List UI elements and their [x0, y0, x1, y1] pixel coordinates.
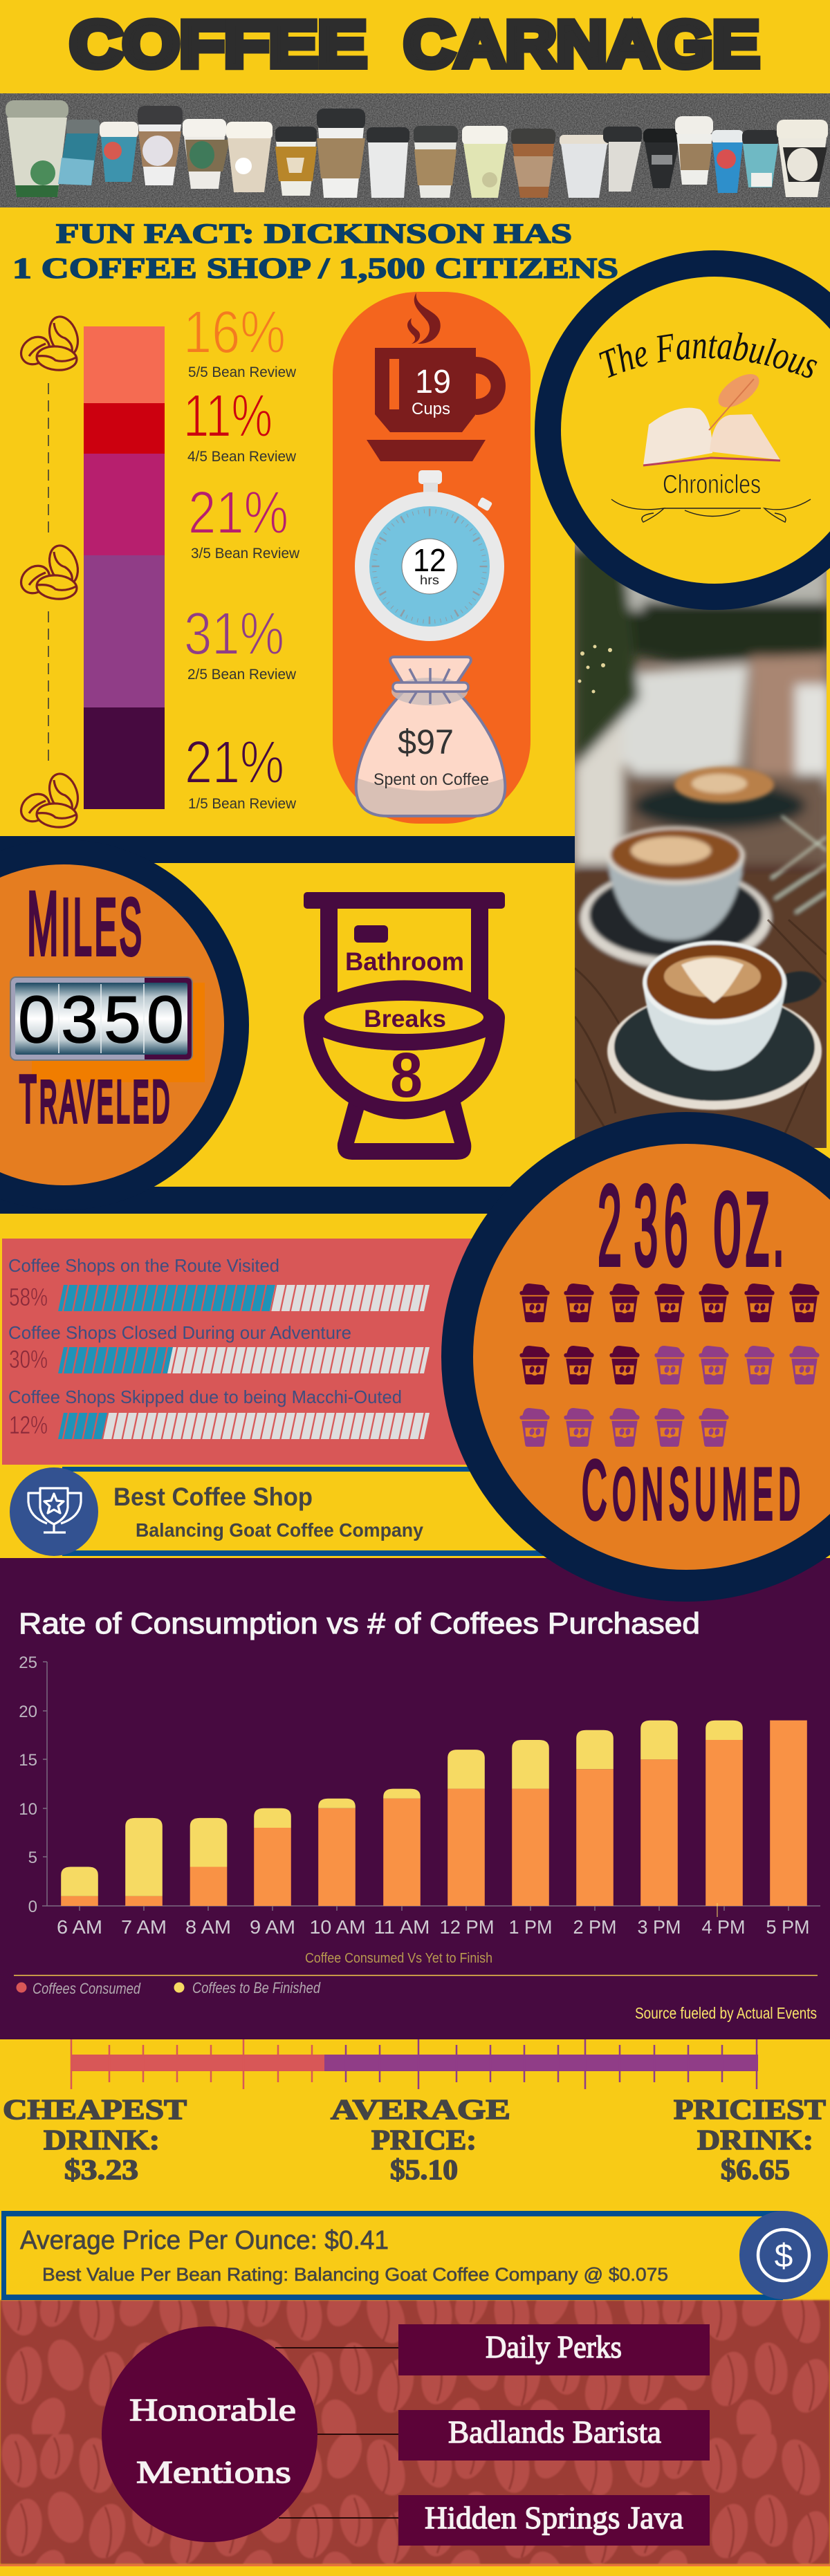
bar: closed	[8, 1322, 430, 1373]
icon: open book with feather	[643, 368, 780, 465]
breaks label: Breaks	[364, 1006, 446, 1032]
bar: skipped	[8, 1387, 430, 1439]
cup 14	[603, 127, 642, 192]
bar: visited: Coffee Shops on the Route Visited	[8, 1255, 279, 1276]
1/5 stat: 1/5 Bean Review	[188, 796, 297, 812]
priciest drink	[674, 2093, 826, 2185]
bar: skipped: Coffee Shops Skipped due to being Macchi-Outed	[8, 1387, 402, 1407]
panel: average price per ounce	[1, 2211, 828, 2300]
x axis labels: 3 PM	[638, 1916, 681, 1938]
odometer: 0	[147, 983, 184, 1057]
y axis labels: 10	[19, 1800, 37, 1819]
axis subtitle: Coffee Consumed Vs Yet to Finish	[305, 1951, 492, 1966]
dashed connector	[48, 383, 49, 762]
legend: Coffees Consumed	[33, 1980, 141, 1997]
priciest drink: PRICIEST	[674, 2093, 826, 2125]
y axis labels: 15	[19, 1751, 37, 1770]
banner: row of coffee cups	[0, 93, 830, 207]
y axis labels: 20	[19, 1703, 37, 1721]
honorable mentions circle: Honorable	[129, 2392, 296, 2427]
x axis labels: 2 PM	[573, 1916, 617, 1938]
logo: The Fantabulous Chronicles	[535, 250, 830, 610]
amount: 236	[598, 1162, 688, 1290]
cup 9	[367, 127, 409, 198]
mention: hidden springs java	[398, 2495, 710, 2546]
icon: dollar coin	[739, 2211, 828, 2299]
divider	[14, 1975, 818, 1976]
foliage speckles	[578, 645, 612, 693]
average price	[331, 2093, 510, 2185]
cheapest drink	[3, 2093, 187, 2185]
3/5 stat: 21%	[188, 479, 288, 546]
honorable mentions circle: Mentions	[136, 2454, 291, 2490]
icon: coffee cup with 19 cups: Cups	[412, 400, 450, 418]
mention: daily perks: Daily Perks	[486, 2329, 622, 2364]
3/5 stat: 3/5 Bean Review	[191, 546, 300, 562]
cup 11	[462, 126, 508, 198]
amount: .	[773, 1162, 784, 1290]
cup 15	[643, 129, 680, 188]
panel: rate of consumption chart	[0, 1558, 830, 2039]
navy band lower	[0, 1187, 540, 1214]
2/5 stat: 31%	[184, 600, 284, 667]
icon: dollar coin: $	[775, 2238, 793, 2274]
bar: closed: Coffee Shops Closed During our Adventure	[8, 1322, 351, 1343]
mention: badlands barista	[398, 2410, 710, 2461]
panel: trip stats	[333, 292, 531, 824]
title: CARNAGE	[404, 8, 759, 80]
y axis labels: 0	[28, 1898, 37, 1916]
icon: money bag $97: Spent on Coffee	[374, 770, 489, 789]
bar: closed: 30%	[9, 1345, 48, 1373]
bars: coffees consumed	[61, 1721, 807, 1906]
bars: coffees to be finished	[61, 1721, 743, 1896]
cup 10	[414, 126, 458, 198]
logo script title: The Fantabulous	[599, 332, 818, 378]
breaks count: 8	[390, 1040, 423, 1111]
honorable mentions circle	[102, 2326, 317, 2542]
icon: coffee beans bottom	[16, 770, 83, 828]
cup 4	[138, 106, 183, 185]
accent block	[32, 983, 205, 1082]
panel: bean review chart	[16, 299, 300, 828]
x axis labels: 10 AM	[310, 1916, 365, 1938]
average price: PRICE:	[371, 2124, 477, 2156]
mention: badlands barista: Badlands Barista	[448, 2414, 661, 2449]
x axis labels	[57, 1916, 809, 1938]
logo subtitle: Chronicles	[663, 470, 761, 499]
cup 1	[6, 100, 68, 197]
ticks purple	[346, 2039, 757, 2089]
bar: visited: 58%	[9, 1283, 48, 1311]
icon: coffee beans top	[16, 313, 83, 371]
navy band	[0, 836, 575, 863]
x axis labels: 12 PM	[440, 1916, 494, 1938]
axes	[42, 1662, 820, 1911]
mention: hidden springs java: Hidden Springs Java	[425, 2500, 683, 2535]
title: COFFEE	[70, 8, 367, 80]
icon: coffee cup with 19 cups	[367, 293, 506, 461]
x axis labels: 9 AM	[250, 1916, 295, 1938]
panel: best coffee shop	[10, 1467, 546, 1556]
panel: coffee shop progress bars	[2, 1239, 500, 1465]
amount: oz	[713, 1143, 771, 1294]
cup 19	[777, 120, 828, 197]
cheapest drink: $3.23	[64, 2153, 138, 2185]
heading: Best Coffee Shop	[113, 1483, 313, 1511]
chart title: Rate of Consumption vs # of Coffees Purchased	[19, 1607, 700, 1640]
cup 16	[675, 116, 713, 185]
annotation tick	[717, 1903, 718, 1917]
x axis labels: 6 AM	[57, 1916, 102, 1938]
cheapest drink: CHEAPEST	[3, 2093, 187, 2125]
x axis labels: 11 AM	[374, 1916, 430, 1938]
stacked bar	[84, 326, 165, 809]
odometer: 5	[104, 983, 141, 1057]
cup 6	[226, 122, 273, 192]
flourish	[611, 499, 811, 522]
average price: AVERAGE	[331, 2093, 510, 2125]
1/5 stat: 21%	[185, 729, 284, 796]
icon: stopwatch with 12 hrs: hrs	[420, 573, 439, 587]
5/5 stat: 16%	[183, 299, 286, 366]
priciest drink: $6.65	[721, 2153, 790, 2185]
consumed heading: CONSUMED	[582, 1444, 800, 1537]
cup 18	[742, 130, 779, 187]
wood grain	[575, 920, 827, 1141]
average price: $5.10	[390, 2153, 458, 2185]
fun fact heading	[12, 218, 618, 285]
miles heading: MILES	[27, 874, 142, 974]
traveled heading: TRAVELED	[19, 1062, 169, 1136]
odometer	[10, 977, 192, 1060]
title	[70, 8, 759, 80]
panel: honorable mentions background	[0, 2300, 830, 2564]
average price text: Average Price Per Ounce: $0.41	[20, 2226, 389, 2255]
cup 7	[275, 127, 317, 196]
odometer: 3	[61, 983, 98, 1057]
panel: 236 oz consumed	[457, 1128, 830, 1586]
fun fact heading: 1 COFFEE SHOP / 1,500 CITIZENS	[12, 253, 618, 285]
priciest drink: DRINK:	[697, 2124, 813, 2156]
y axis labels: 25	[19, 1653, 37, 1672]
cup 12	[511, 129, 555, 198]
photo: latte cups on table	[575, 526, 830, 1155]
odometer: 0	[18, 983, 55, 1057]
best value text: Best Value Per Bean Rating: Balancing Goat Coffee Company @ $0.075	[42, 2264, 668, 2285]
icon: stopwatch with 12 hrs: 12	[413, 542, 446, 578]
cheapest drink: DRINK:	[44, 2124, 160, 2156]
cup 2	[58, 120, 100, 185]
bar: visited	[8, 1255, 430, 1311]
bathroom label: Bathroom	[345, 947, 464, 976]
mention: daily perks	[398, 2324, 710, 2375]
panel: miles traveled	[0, 852, 237, 1198]
x axis labels: 8 AM	[185, 1916, 231, 1938]
cup 17	[712, 130, 744, 193]
bar: skipped: 12%	[9, 1411, 48, 1439]
panel: honorable mentions	[102, 2324, 710, 2546]
y axis labels	[19, 1653, 37, 1916]
panel: toilet bathroom breaks	[304, 892, 505, 1160]
4/5 stat: 4/5 Bean Review	[187, 449, 297, 465]
icon: stopwatch with 12 hrs	[355, 470, 504, 641]
icon: coffee beans middle	[16, 541, 83, 600]
x axis labels: 4 PM	[701, 1916, 746, 1938]
cup 8	[317, 109, 365, 198]
connectors	[275, 2348, 398, 2518]
icon: money bag $97	[356, 657, 505, 816]
4/5 stat: 11%	[183, 382, 273, 450]
icon: trophy badge	[10, 1467, 98, 1556]
x axis labels: 7 AM	[121, 1916, 167, 1938]
winner: Balancing Goat Coffee Company	[136, 1519, 423, 1541]
cup 13	[560, 135, 609, 198]
ticks red	[71, 2039, 312, 2089]
cup 3	[100, 122, 138, 182]
footer strip	[0, 2564, 830, 2566]
y axis labels: 5	[28, 1848, 37, 1867]
2/5 stat: 2/5 Bean Review	[187, 667, 297, 683]
legend	[17, 1979, 321, 1997]
5/5 stat: 5/5 Bean Review	[188, 364, 297, 380]
fun fact heading: FUN FACT: DICKINSON HAS	[56, 218, 572, 249]
icon: money bag $97: $97	[398, 723, 454, 761]
ruler: price range	[71, 2039, 758, 2089]
x axis labels: 5 PM	[766, 1916, 809, 1938]
icon: coffee cup with 19 cups: 19	[415, 364, 451, 400]
cup 5	[183, 119, 230, 189]
cup pictogram	[519, 1284, 820, 1447]
x axis labels: 1 PM	[509, 1916, 552, 1938]
legend: Coffees to Be Finished	[192, 1979, 321, 1996]
